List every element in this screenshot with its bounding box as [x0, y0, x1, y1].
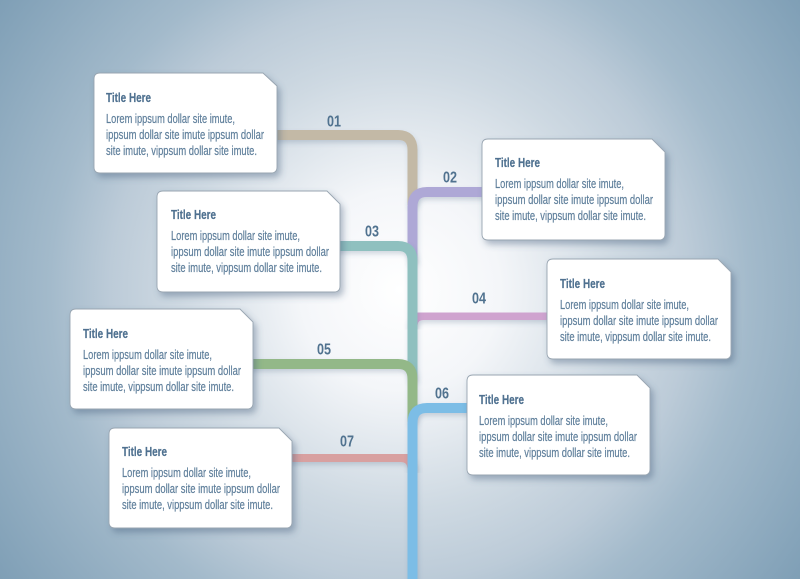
card 01: [94, 73, 277, 173]
card text: ippsum dollar site imute ippsum dollar: [106, 128, 264, 142]
card shape: [467, 375, 650, 475]
card title: Title Here: [106, 90, 151, 105]
card text: site imute, vippsum dollar site imute.: [106, 144, 257, 158]
card 06: [467, 375, 650, 475]
card text: site imute, vippsum dollar site imute.: [495, 209, 646, 223]
card text: ippsum dollar site imute ippsum dollar: [83, 364, 241, 378]
card text: Lorem ippsum dollar site imute,: [83, 348, 212, 362]
number 03: 03: [365, 224, 379, 240]
card shape: [109, 428, 292, 528]
card text: ippsum dollar site imute ippsum dollar: [479, 430, 637, 444]
card shape: [157, 191, 340, 292]
card text: ippsum dollar site imute ippsum dollar: [495, 193, 653, 207]
card 04: [547, 259, 731, 359]
connector 06: [412, 408, 475, 579]
card 07: [109, 428, 292, 528]
card title: Title Here: [122, 444, 167, 459]
number 01: 01: [327, 114, 341, 130]
card 03: [157, 191, 340, 292]
card text: Lorem ippsum dollar site imute,: [560, 298, 689, 312]
card shape: [70, 309, 253, 409]
card text: [83, 348, 241, 394]
card text: Lorem ippsum dollar site imute,: [122, 466, 251, 480]
card title: Title Here: [83, 326, 128, 341]
number 06: 06: [435, 386, 449, 402]
card title: Title Here: [171, 207, 216, 222]
card title: Title Here: [560, 276, 605, 291]
card text: site imute, vippsum dollar site imute.: [122, 498, 273, 512]
card text: Lorem ippsum dollar site imute,: [495, 177, 624, 191]
card 02: [482, 139, 665, 240]
card text: ippsum dollar site imute ippsum dollar: [560, 314, 718, 328]
card text: [560, 298, 718, 344]
card text: [495, 177, 653, 223]
connector 05: [246, 364, 412, 422]
card text: Lorem ippsum dollar site imute,: [106, 112, 235, 126]
card shape: [94, 73, 277, 173]
number 07: 07: [340, 434, 354, 450]
card shape: [547, 259, 731, 359]
card text: site imute, vippsum dollar site imute.: [171, 261, 322, 275]
card title: Title Here: [495, 155, 540, 170]
card 05: [70, 309, 253, 409]
card text: [122, 466, 280, 512]
number 05: 05: [317, 342, 331, 358]
connector 04: [412, 315, 555, 327]
card text: [171, 229, 329, 275]
connector 02: [412, 192, 490, 262]
card text: Lorem ippsum dollar site imute,: [171, 229, 300, 243]
card shape: [482, 139, 665, 240]
card text: site imute, vippsum dollar site imute.: [479, 446, 630, 460]
card text: [106, 112, 264, 158]
card text: [479, 414, 637, 460]
number 04: 04: [472, 290, 486, 308]
card text: Lorem ippsum dollar site imute,: [479, 414, 608, 428]
connector 03: [333, 246, 412, 380]
number 02: 02: [443, 170, 457, 186]
card text: ippsum dollar site imute ippsum dollar: [171, 245, 329, 259]
card text: site imute, vippsum dollar site imute.: [83, 380, 234, 394]
card text: site imute, vippsum dollar site imute.: [560, 330, 711, 344]
card text: ippsum dollar site imute ippsum dollar: [122, 482, 280, 496]
connector 01: [270, 135, 412, 205]
card title: Title Here: [479, 392, 524, 407]
connector 07: [285, 457, 412, 470]
